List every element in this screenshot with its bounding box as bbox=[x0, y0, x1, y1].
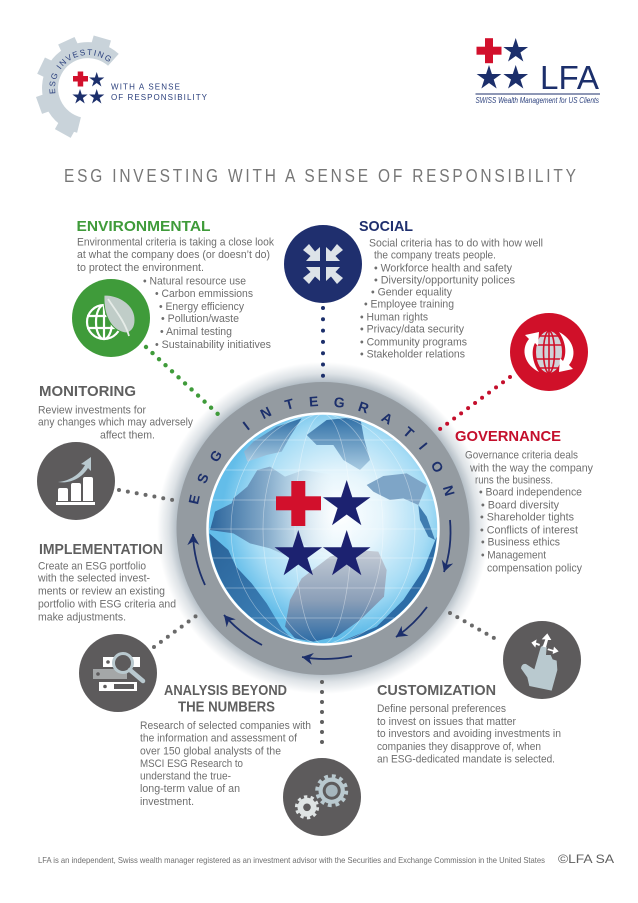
criteria text: • Diversity/opportunity polices bbox=[374, 274, 515, 286]
ring label: ESG INTEGRATION: R bbox=[356, 398, 371, 416]
ring label: ESG INTEGRATION: O bbox=[428, 458, 447, 475]
description: any changes which may adversely bbox=[38, 416, 194, 428]
criteria text: with the way the company bbox=[469, 462, 594, 474]
criteria text: • Pollution/waste bbox=[161, 313, 239, 325]
ring halo bbox=[157, 362, 489, 694]
dotted connector: analysis bbox=[320, 682, 324, 752]
icon: gears bbox=[283, 758, 361, 836]
grey ring bbox=[176, 382, 470, 675]
criteria text: at what the company does (or doesn’t do) bbox=[77, 249, 270, 261]
ring label: ESG INTEGRATION: G bbox=[206, 447, 225, 465]
criteria text bbox=[465, 450, 594, 574]
dotted connector: monitoring bbox=[119, 490, 173, 500]
description: investment. bbox=[140, 796, 194, 808]
dotted connector: environmental bbox=[146, 347, 220, 416]
dotted connector: social bbox=[321, 308, 325, 376]
description: an ESG-dedicated mandate is selected. bbox=[377, 754, 555, 766]
icon: servers and magnifier bbox=[79, 634, 157, 712]
description: make adjustments. bbox=[38, 612, 126, 624]
panel: customization bbox=[377, 621, 581, 766]
criteria text: compensation policy bbox=[487, 562, 583, 574]
description: Research of selected companies with bbox=[140, 720, 311, 732]
description: ments or review an existing bbox=[38, 586, 165, 598]
criteria text: • Management bbox=[481, 550, 546, 562]
criteria text: • Stakeholder relations bbox=[360, 348, 465, 360]
description bbox=[38, 404, 194, 442]
globe bbox=[208, 414, 440, 644]
description: understand the true- bbox=[140, 770, 231, 782]
description bbox=[140, 720, 311, 808]
criteria text: • Workforce health and safety bbox=[374, 262, 513, 274]
criteria text: • Business ethics bbox=[481, 536, 560, 548]
ring label: ESG INTEGRATION: I bbox=[240, 418, 252, 433]
description: affect them. bbox=[100, 430, 155, 442]
criteria text: • Energy efficiency bbox=[159, 301, 245, 313]
description: Define personal preferences bbox=[377, 703, 506, 715]
ring label: ESG INTEGRATION bbox=[185, 393, 458, 506]
icon: rising bar chart bbox=[37, 442, 115, 520]
footer note: LFA is an independent, Swiss wealth manager registered as an investment advisor with the Securities and Exchange Commission in the United States bbox=[38, 856, 545, 865]
icon: touch gesture bbox=[503, 621, 581, 699]
criteria text: the company treats people. bbox=[374, 250, 496, 262]
criteria text: • Community programs bbox=[360, 336, 467, 348]
description: the information and assessment of bbox=[140, 733, 297, 745]
criteria text: • Board independence bbox=[479, 486, 582, 498]
ring label: ESG INTEGRATION: T bbox=[283, 395, 296, 413]
ring label: ESG INTEGRATION: N bbox=[258, 403, 274, 422]
heading: THE NUMBERS bbox=[178, 699, 275, 716]
ring label: ESG INTEGRATION: E bbox=[185, 493, 203, 506]
heading: IMPLEMENTATION bbox=[39, 541, 163, 558]
criteria text: • Animal testing bbox=[160, 326, 232, 338]
description: to invest on issues that matter bbox=[377, 716, 516, 728]
logo: LFA bbox=[476, 38, 600, 105]
logo: LFA: SWISS Wealth Management for US Clients bbox=[476, 96, 599, 105]
description: to investors and avoiding investments in bbox=[377, 728, 561, 740]
dotted connector: customization bbox=[450, 613, 501, 642]
ring label: ESG INTEGRATION: I bbox=[416, 439, 431, 453]
dotted connector: governance bbox=[440, 377, 510, 429]
ring arrows bbox=[193, 520, 451, 659]
panel: analysis beyond the numbers bbox=[140, 682, 361, 836]
description: portfolio with ESG criteria and bbox=[38, 598, 176, 610]
description: over 150 global analysts of the bbox=[140, 745, 281, 757]
logo: ESG investing gear: WITH A SENSE bbox=[111, 82, 180, 92]
criteria text: Social criteria has to do with how well bbox=[369, 238, 543, 250]
criteria text: • Board diversity bbox=[481, 500, 560, 512]
description: MSCI ESG Research to bbox=[140, 758, 243, 770]
criteria text: • Natural resource use bbox=[143, 276, 246, 288]
description: Create an ESG portfolio bbox=[38, 560, 146, 572]
icon: inward arrows bbox=[284, 225, 362, 303]
criteria text: Governance criteria deals bbox=[465, 450, 578, 462]
criteria text: • Privacy/data security bbox=[360, 324, 465, 336]
logo: LFA: LFA bbox=[540, 59, 599, 96]
logo: ESG investing gear: ESG INVESTING bbox=[49, 49, 112, 94]
panel: monitoring bbox=[37, 383, 194, 520]
heading: GOVERNANCE bbox=[455, 428, 561, 445]
globe emblem: cross and stars bbox=[275, 480, 370, 575]
heading: SOCIAL bbox=[359, 218, 413, 235]
criteria text: • Carbon emmissions bbox=[155, 288, 253, 300]
heading: ANALYSIS BEYOND bbox=[164, 682, 287, 699]
heading: CUSTOMIZATION bbox=[377, 682, 496, 699]
title: ESG INVESTING WITH A SENSE OF RESPONSIBILITY bbox=[64, 166, 576, 186]
description bbox=[37, 560, 176, 624]
heading: ENVIRONMENTAL bbox=[76, 218, 210, 235]
panel: environmental bbox=[72, 218, 275, 357]
criteria text: • Shareholder tights bbox=[480, 512, 574, 524]
criteria text: runs the business. bbox=[475, 474, 553, 486]
logo: ESG investing gear: OF RESPONSIBILITY bbox=[111, 93, 208, 102]
logo: ESG investing gear bbox=[36, 36, 208, 138]
icon: globe with arrows bbox=[510, 313, 588, 391]
copyright: ©LFA SA bbox=[558, 852, 614, 866]
panel: implementation bbox=[37, 541, 176, 712]
description: long-term value of an bbox=[140, 783, 240, 795]
description: companies they disapprove of, when bbox=[377, 741, 541, 753]
description: Review investments for bbox=[38, 404, 146, 416]
criteria text: • Employee training bbox=[364, 298, 454, 310]
criteria text: • Sustainability initiatives bbox=[155, 339, 271, 351]
central globe diagram bbox=[157, 362, 489, 694]
criteria text: • Conflicts of interest bbox=[480, 524, 578, 536]
ring label: ESG INTEGRATION: N bbox=[440, 484, 458, 498]
ring label: ESG INTEGRATION: E bbox=[308, 393, 319, 410]
criteria text: Environmental criteria is taking a close look bbox=[77, 237, 275, 249]
ring label: ESG INTEGRATION: S bbox=[194, 471, 212, 486]
criteria text: • Gender equality bbox=[371, 286, 453, 298]
icon: globe and leaf bbox=[72, 279, 150, 357]
ring label: ESG INTEGRATION: G bbox=[333, 394, 346, 411]
ring label: ESG INTEGRATION: A bbox=[379, 409, 396, 428]
criteria text bbox=[77, 237, 275, 351]
heading: MONITORING bbox=[39, 383, 136, 400]
criteria text bbox=[360, 238, 543, 360]
panel: governance bbox=[455, 313, 594, 574]
criteria text: • Human rights bbox=[360, 312, 428, 324]
description: with the selected invest- bbox=[37, 572, 150, 584]
criteria text: to protect the environment. bbox=[77, 262, 204, 274]
ring label: ESG INTEGRATION: T bbox=[400, 423, 418, 441]
dotted connector: implementation bbox=[154, 616, 196, 647]
panel: social bbox=[284, 218, 543, 360]
description bbox=[377, 703, 561, 766]
heading bbox=[164, 682, 287, 716]
